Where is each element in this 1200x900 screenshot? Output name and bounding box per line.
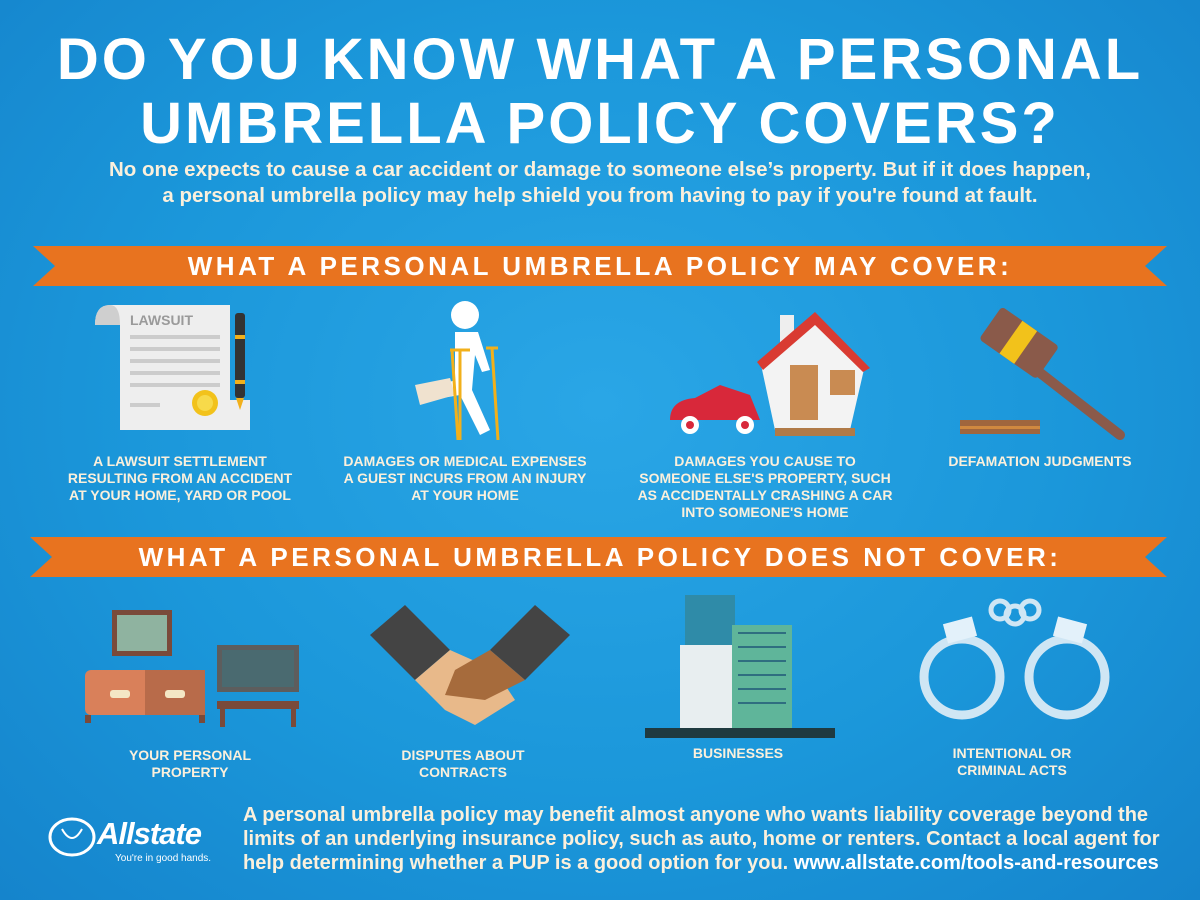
caption 4: DEFAMATION JUDGMENTS [948, 453, 1132, 469]
title: DO YOU KNOW WHAT A PERSONAL [57, 27, 1143, 92]
banner: may cover: WHAT A PERSONAL UMBRELLA POLICY MAY COVER: [188, 251, 1012, 281]
caption 5: PROPERTY [151, 764, 228, 780]
subtitle: a personal umbrella policy may help shield you from having to pay if you're found at fault. [162, 184, 1038, 207]
caption 3: INTO SOMEONE'S HOME [681, 504, 849, 520]
caption 3: AS ACCIDENTALLY CRASHING A CAR [638, 487, 892, 503]
icon: car crashing house [670, 312, 870, 436]
caption 8: CRIMINAL ACTS [957, 762, 1067, 778]
caption 7: BUSINESSES [693, 745, 783, 761]
icon: lawsuit scroll: LAWSUIT [130, 312, 193, 328]
caption 3 [638, 453, 892, 520]
caption 2: A GUEST INCURS FROM AN INJURY [344, 470, 586, 486]
subtitle [109, 158, 1091, 207]
logo: Allstate [48, 816, 211, 864]
icon: handshake [370, 605, 570, 725]
footer text: A personal umbrella policy may benefit almost anyone who wants liability coverage beyond the limits of an underlying insurance policy, such as auto, home or renters. Contact a local agent for help determining whether a PUP is a good option for you. www.allstate.com/tools-and-resources [243, 804, 1159, 874]
caption 6: DISPUTES ABOUT [401, 747, 525, 763]
caption 5 [129, 747, 251, 780]
caption 1: RESULTING FROM AN ACCIDENT [68, 470, 292, 486]
logo: Allstate: Allstate [97, 816, 201, 851]
caption 8: INTENTIONAL OR [953, 745, 1071, 761]
caption 2: DAMAGES OR MEDICAL EXPENSES [343, 453, 587, 469]
banner: may cover [33, 246, 1167, 286]
title: UMBRELLA POLICY COVERS? [140, 91, 1060, 156]
subtitle: No one expects to cause a car accident or damage to someone else’s property. But if it does happen, [109, 158, 1091, 181]
icon: injured person [415, 301, 500, 440]
caption 1 [68, 453, 292, 503]
caption 8 [953, 745, 1071, 778]
icon: buildings [645, 595, 835, 738]
caption 6 [401, 747, 525, 780]
title [57, 27, 1143, 156]
caption 5: YOUR PERSONAL [129, 747, 251, 763]
caption 1: A LAWSUIT SETTLEMENT [93, 453, 267, 469]
caption 1: AT YOUR HOME, YARD OR POOL [69, 487, 291, 503]
banner: does not cover [30, 537, 1167, 577]
caption 6: CONTRACTS [419, 764, 507, 780]
icon: handcuffs [920, 598, 1110, 720]
caption 2: AT YOUR HOME [411, 487, 519, 503]
icon: lawsuit scroll [95, 305, 250, 430]
logo: Allstate: You're in good hands. [115, 853, 211, 864]
caption 2 [343, 453, 587, 503]
icon: furniture [85, 610, 299, 727]
icon: gavel [960, 308, 1125, 440]
banner: does not cover: WHAT A PERSONAL UMBRELLA POLICY DOES NOT COVER: [139, 542, 1061, 572]
caption 3: DAMAGES YOU CAUSE TO [674, 453, 856, 469]
caption 3: SOMEONE ELSE'S PROPERTY, SUCH [639, 470, 891, 486]
